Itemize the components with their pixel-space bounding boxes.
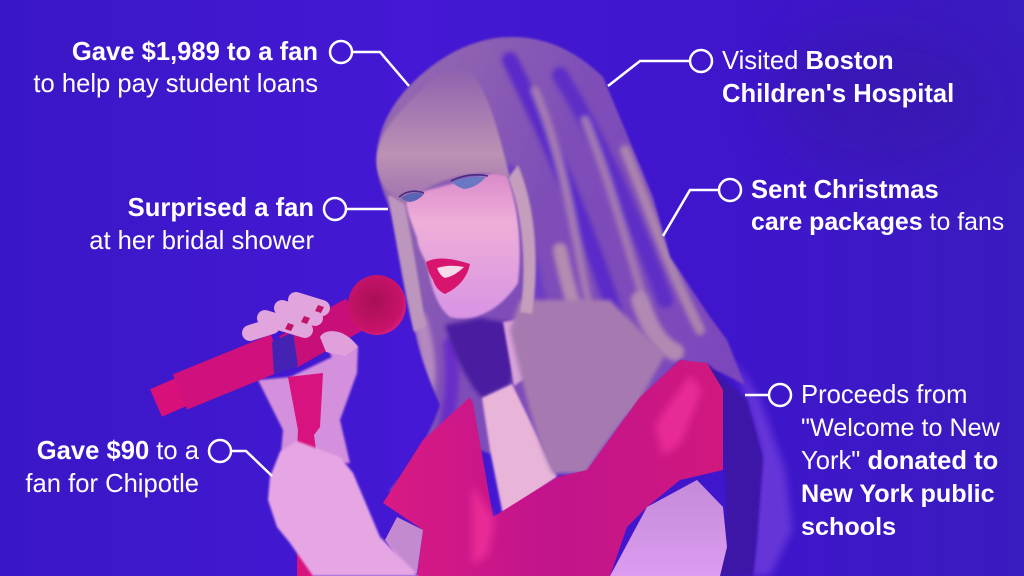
callout: New York public schools: York" donated to	[801, 447, 998, 475]
eyes	[399, 175, 488, 202]
mic grip band	[272, 332, 298, 374]
lips and teeth	[426, 258, 470, 294]
upper fingers	[250, 300, 322, 333]
mic head	[348, 275, 406, 335]
hair strands over chest	[510, 300, 665, 474]
right arm	[610, 480, 727, 576]
face	[405, 170, 520, 319]
nails	[285, 305, 324, 331]
callout: Chipotle: fan for Chipotle	[25, 470, 199, 498]
back sleeve shadow	[707, 363, 763, 576]
chest	[482, 384, 557, 515]
callout: Christmas care packages: Sent Christmas	[751, 176, 939, 204]
callout: Chipotle: Gave $90 to a	[37, 437, 200, 465]
callout: bridal shower: at her bridal shower	[89, 227, 314, 255]
callout: student loans	[33, 38, 409, 98]
bangs	[377, 62, 510, 204]
microphone	[156, 275, 406, 403]
callout: New York public schools: Proceeds from	[801, 381, 967, 409]
callout: student loans: to help pay student loans	[33, 70, 318, 98]
callout: bridal shower: Surprised a fan	[128, 194, 314, 222]
callout: Boston Children's Hospital	[608, 47, 954, 108]
callout: New York public schools: schools	[801, 513, 896, 541]
lower hand	[268, 441, 418, 576]
background	[294, 0, 1024, 576]
callout: bridal shower	[90, 196, 388, 250]
callout: Christmas care packages	[663, 176, 1004, 236]
thumb	[320, 331, 358, 356]
left upper arm	[385, 517, 423, 573]
callout: Boston Children's Hospital: Visited Boston	[722, 47, 894, 75]
hair	[376, 36, 745, 492]
dress highlights	[472, 375, 702, 565]
left hair strand	[388, 195, 426, 332]
callout: New York public schools: New York public	[801, 480, 995, 508]
under chin shadow	[445, 318, 522, 398]
dress	[383, 360, 723, 576]
callout: New York public schools	[745, 381, 1001, 541]
callout: student loans: Gave $1,989 to a fan	[72, 38, 318, 66]
callout: Chipotle	[25, 437, 272, 498]
hair side strand by face	[508, 165, 536, 314]
callout: New York public schools: "Welcome to New	[801, 414, 1001, 442]
hair wisps at lower right	[735, 360, 792, 576]
stand	[288, 373, 323, 576]
singer photo illustration	[156, 30, 795, 576]
callout: Christmas care packages: care packages to fans	[751, 208, 1004, 236]
neck	[502, 319, 524, 386]
callout: Boston Children's Hospital: Children's Hospital	[722, 80, 954, 108]
palm	[258, 332, 358, 465]
